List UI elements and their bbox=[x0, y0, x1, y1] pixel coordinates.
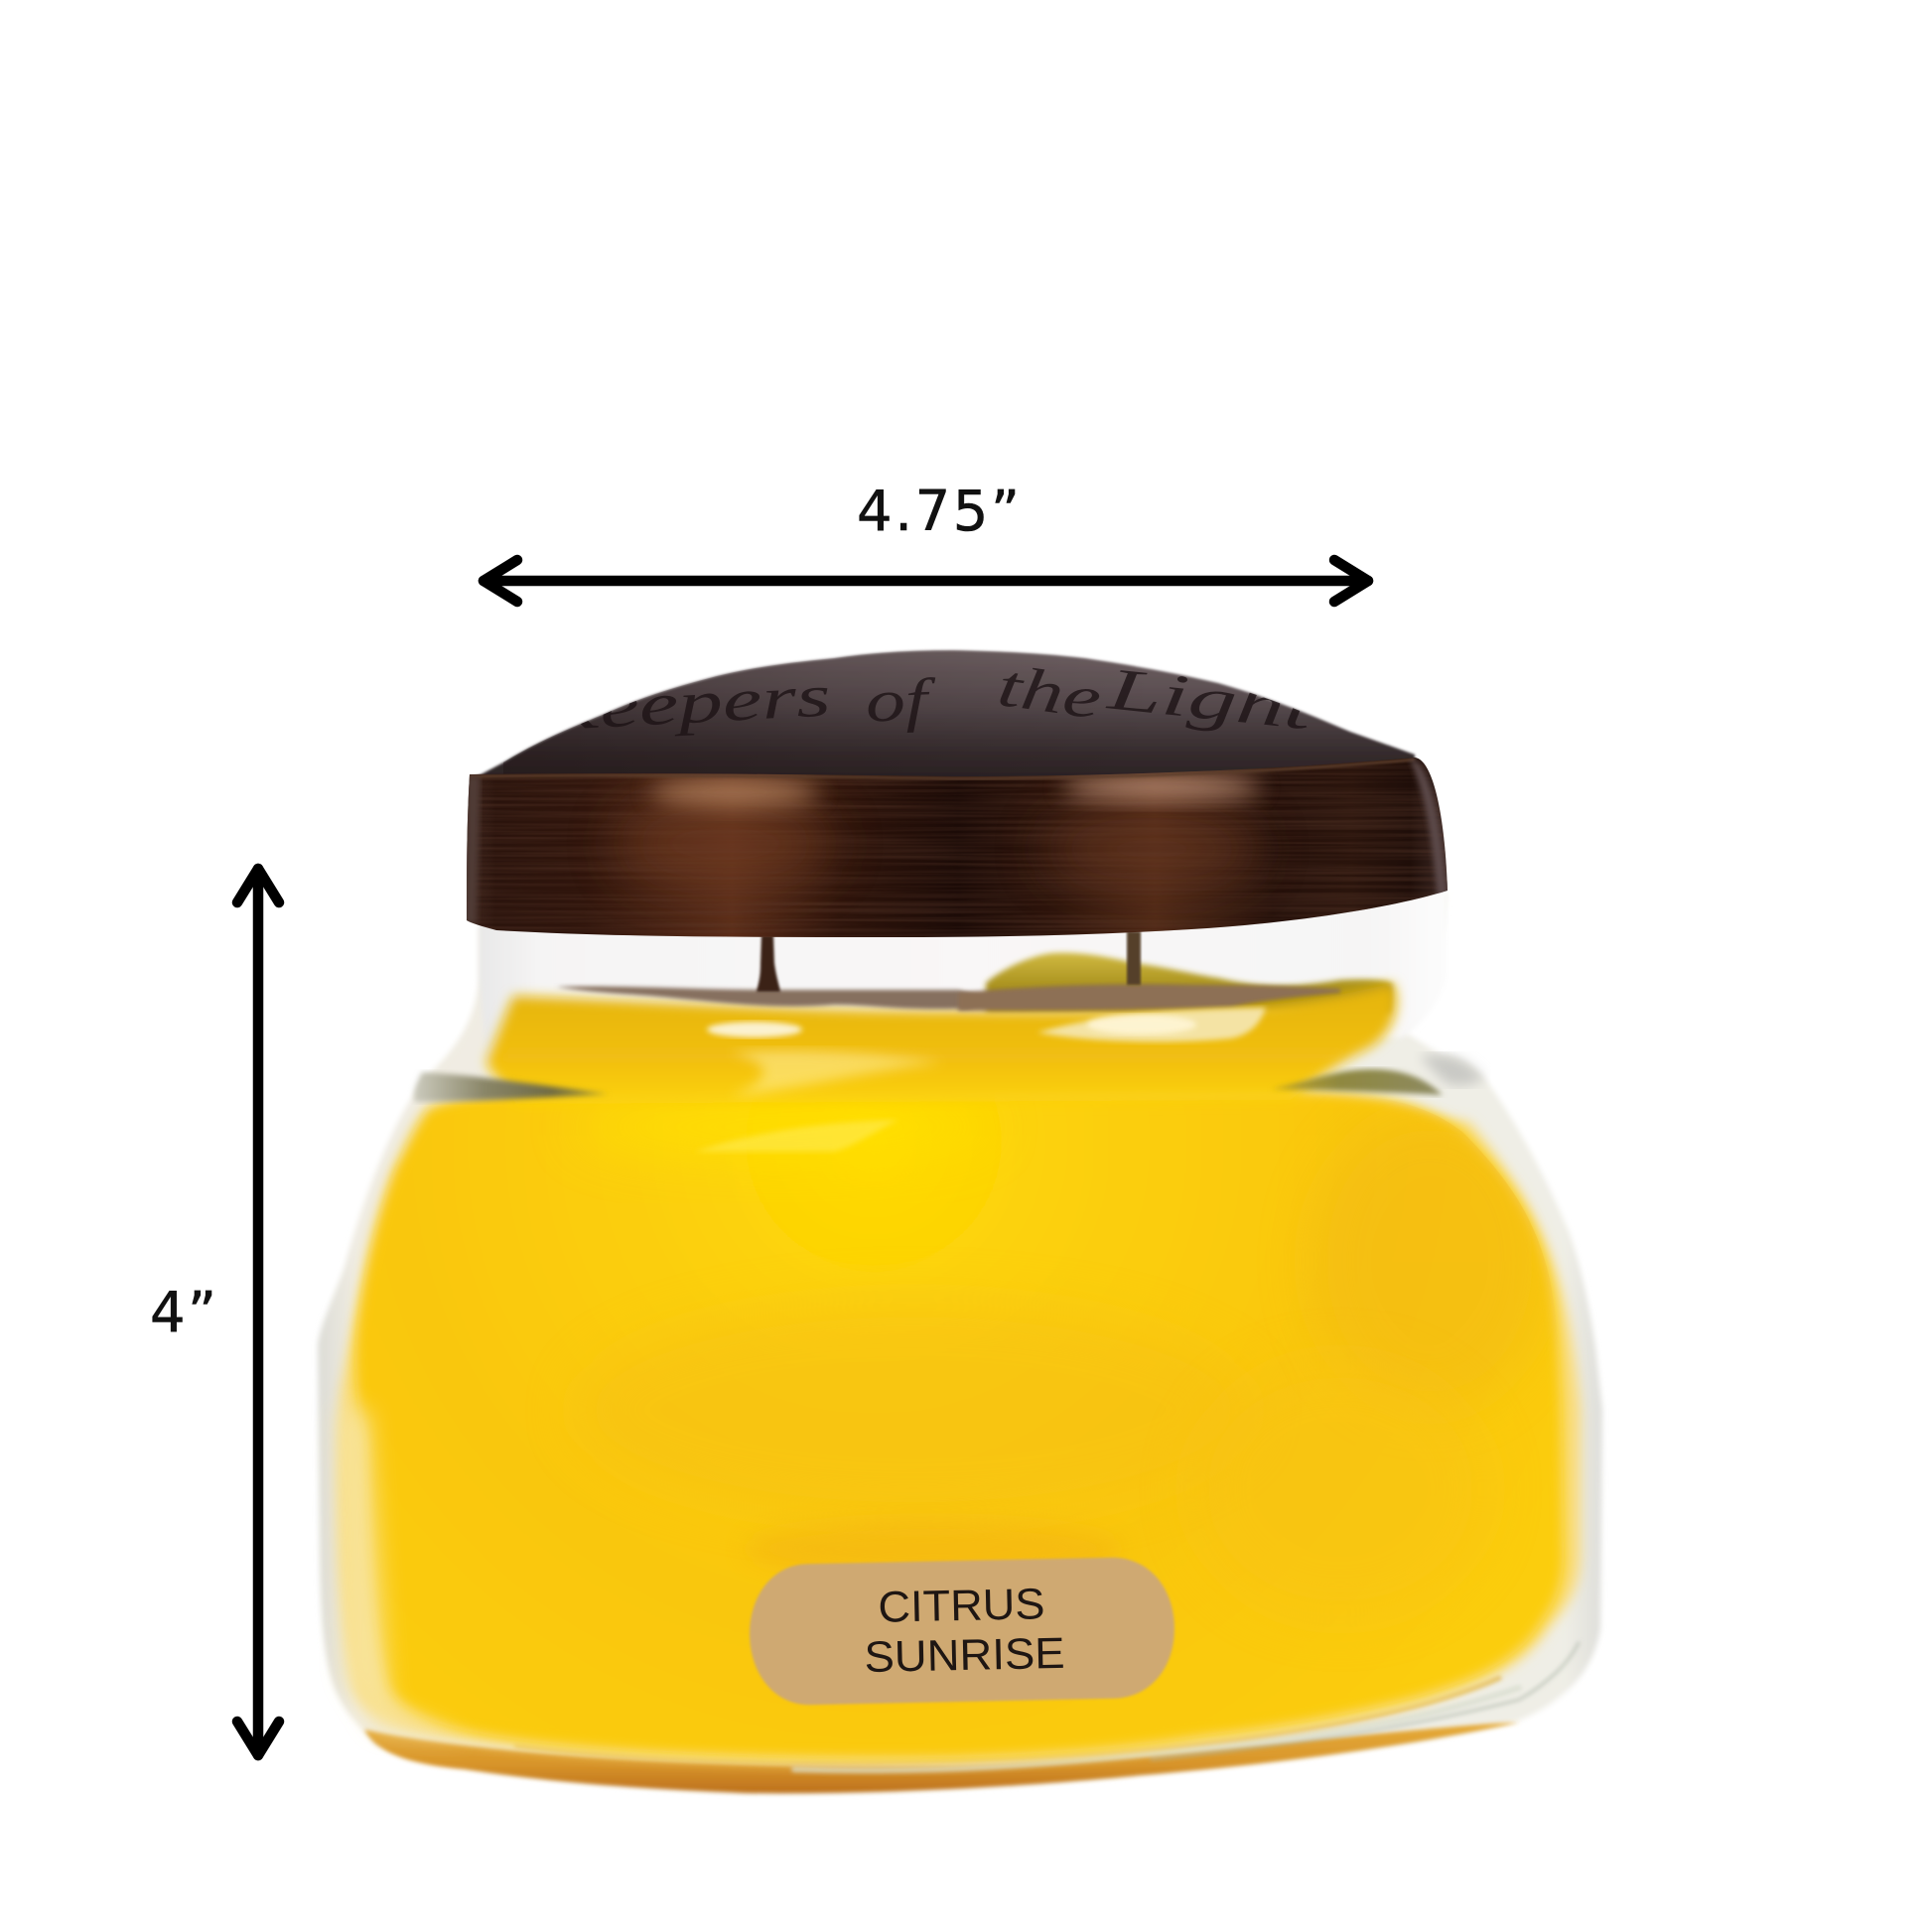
embossed lid text bbox=[581, 667, 1307, 737]
wick right bbox=[1127, 931, 1141, 985]
brown wax line in neck, left bbox=[556, 987, 993, 1009]
word: of: of bbox=[865, 666, 938, 735]
wax seen through the back of the neck bbox=[986, 953, 1393, 1013]
darker wax tone, middle bbox=[796, 1331, 965, 1378]
label text: CITRUS: CITRUS bbox=[878, 1580, 1045, 1632]
highlight right bbox=[1062, 776, 1261, 798]
copper glow left bbox=[616, 799, 834, 889]
bright yellow glow bbox=[635, 1112, 727, 1140]
arrow head top bbox=[237, 869, 279, 902]
pale left wall of wax bbox=[340, 1410, 467, 1739]
core of right highlight bbox=[1087, 1015, 1196, 1035]
highlight under left wick bbox=[707, 1022, 802, 1037]
arrow head bottom bbox=[237, 1722, 279, 1755]
wax highlights bbox=[695, 1008, 1266, 1152]
pale ring bbox=[794, 1688, 1519, 1770]
shoulder shadow right bbox=[1271, 1069, 1443, 1095]
soft band in shoulder bbox=[695, 1120, 898, 1152]
arrow shaft bbox=[483, 576, 1368, 586]
orange tone lower right bbox=[1191, 1360, 1489, 1618]
pale wax halo near glass bbox=[339, 1092, 1581, 1763]
brushed texture bbox=[467, 765, 1446, 937]
grey ring bbox=[1152, 1643, 1579, 1759]
lid dome shading bbox=[503, 650, 1031, 774]
word: Keepers: Keepers bbox=[538, 662, 832, 744]
wax tone patches bbox=[576, 1092, 1549, 1618]
wax surface in neck bbox=[486, 983, 1397, 1104]
height dimension arrow bbox=[237, 869, 279, 1755]
left edge sheen bbox=[465, 776, 481, 923]
wax body bbox=[355, 1092, 1564, 1757]
glass base rings bbox=[516, 1643, 1579, 1770]
arrow head right bbox=[1334, 560, 1368, 602]
soft band across neck bbox=[730, 1050, 943, 1097]
brown wax line in neck, right bbox=[958, 984, 1340, 1011]
wick left bbox=[757, 935, 780, 992]
label background bbox=[749, 1557, 1175, 1706]
highlight left bbox=[650, 779, 819, 805]
candle jar bbox=[318, 645, 1602, 1793]
lid dome bbox=[472, 650, 1415, 784]
top edge line bbox=[470, 759, 1415, 778]
rim brushed metal and highlights bbox=[467, 758, 1448, 937]
shoulder shadow left bbox=[414, 1072, 609, 1102]
darker wax tone, right side bbox=[1356, 1098, 1557, 1375]
lid bbox=[457, 645, 1459, 943]
right edge sheen bbox=[1410, 759, 1448, 898]
arrow shaft bbox=[253, 869, 263, 1755]
tan ring bbox=[516, 1678, 1499, 1762]
infographic: candle jar with dimensions bbox=[152, 488, 1604, 1797]
orange wax base bbox=[364, 1723, 1519, 1793]
label text: SUNRISE: SUNRISE bbox=[864, 1629, 1065, 1682]
highlight under right wick bbox=[1037, 1008, 1266, 1041]
scent label bbox=[749, 1557, 1175, 1706]
lid rim bbox=[467, 758, 1448, 937]
height label: 4” bbox=[150, 1281, 216, 1345]
arrow head left bbox=[483, 560, 517, 602]
word: the: the bbox=[994, 652, 1105, 732]
glass neck bbox=[480, 889, 1447, 1062]
glass jar body bbox=[318, 894, 1602, 1793]
width dimension arrow bbox=[483, 560, 1368, 602]
glass shoulder grey right bbox=[1420, 1054, 1484, 1086]
copper glow right bbox=[1042, 809, 1261, 889]
orange tone above label bbox=[763, 1526, 1099, 1563]
width label: 4.75” bbox=[857, 480, 1020, 544]
word: Light: Light bbox=[1104, 655, 1316, 743]
